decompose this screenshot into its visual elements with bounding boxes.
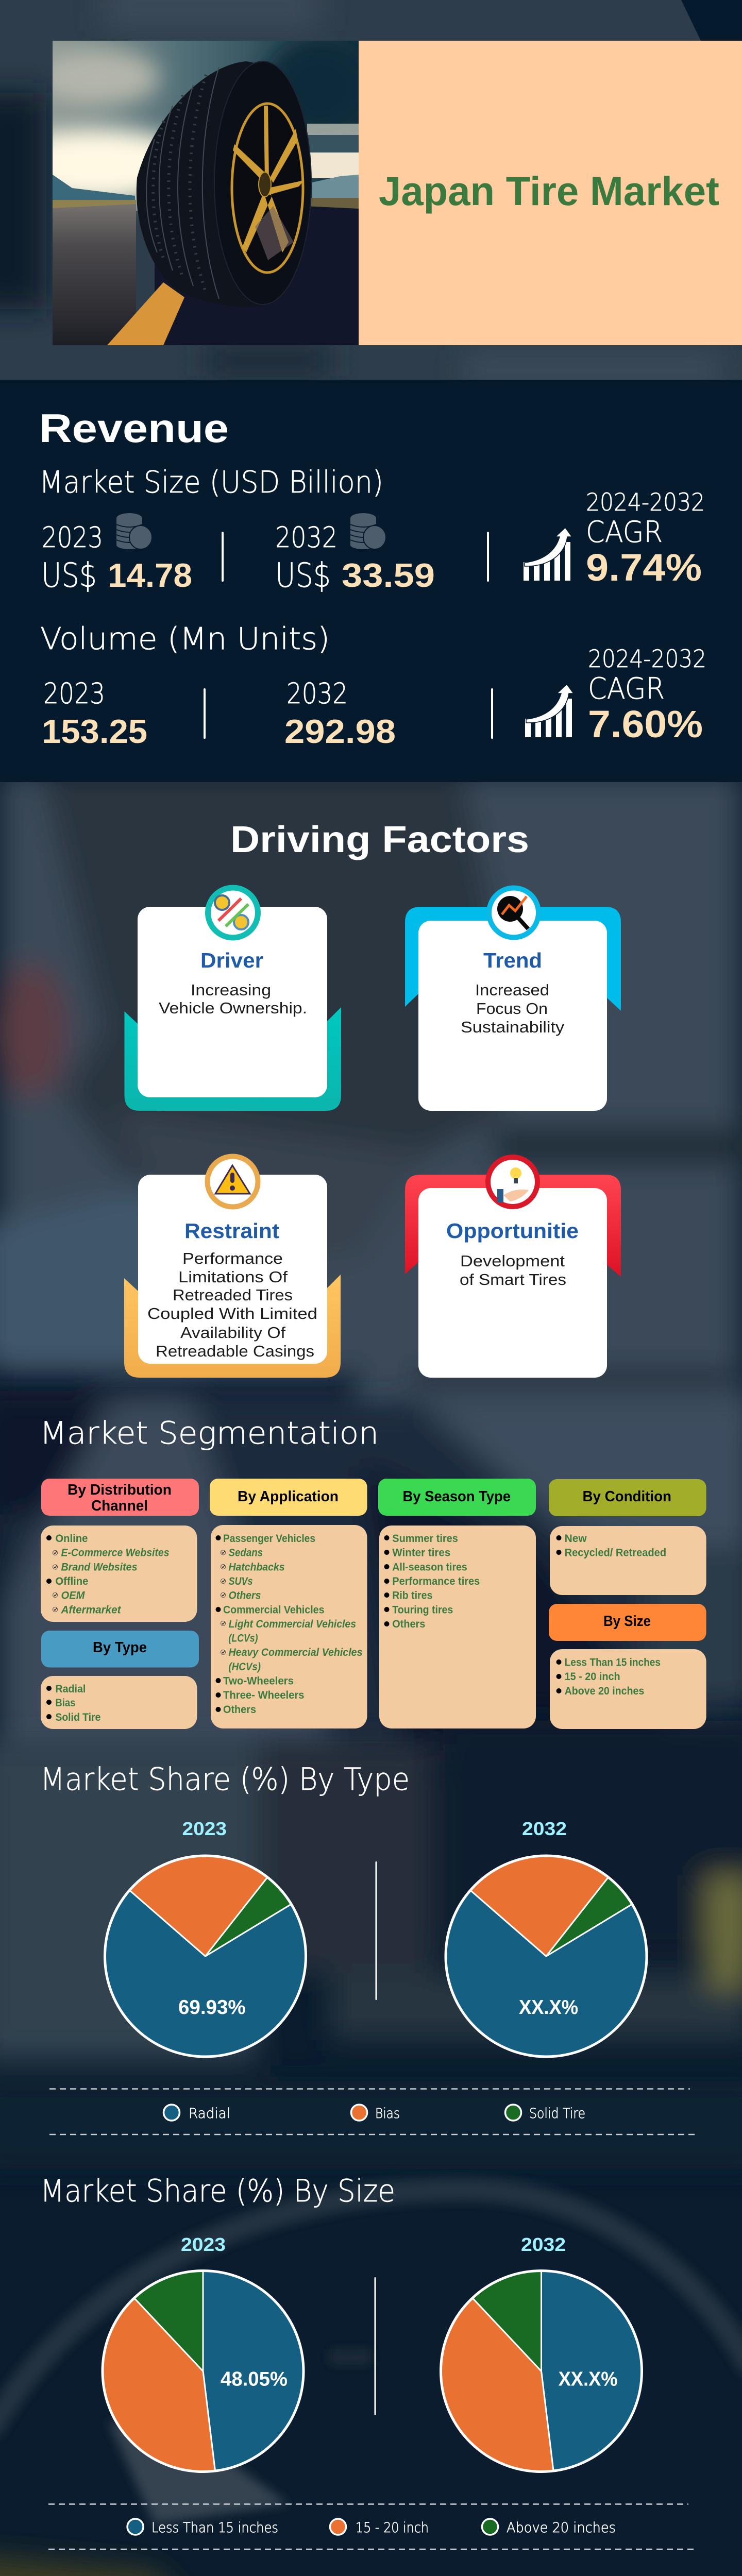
season list: Rib tires xyxy=(392,1590,432,1602)
stat: market size 2023: 2023 xyxy=(42,521,103,554)
distribution list: Brand Websites xyxy=(61,1561,137,1573)
pie chart: type 2023: 69.93% xyxy=(178,1996,246,2019)
application list: (HCVs) xyxy=(229,1661,261,1673)
icon: driver xyxy=(205,885,261,941)
panel: revenue xyxy=(0,380,742,782)
card: trend xyxy=(405,885,621,1111)
stat: market size CAGR: 9.74% xyxy=(586,546,702,589)
year label 2032: 2032 xyxy=(522,1818,567,1839)
stat: volume 2023: 2023 xyxy=(43,677,105,710)
stat: market size 2032: 33.59 xyxy=(342,556,435,594)
opportunity title: Opportunitie xyxy=(446,1219,579,1243)
stat: market size CAGR: 2024-2032 xyxy=(586,488,705,517)
application list: Others xyxy=(223,1704,256,1716)
distribution list: Aftermarket xyxy=(61,1604,121,1616)
driver text xyxy=(159,981,307,1017)
distribution list: Online xyxy=(55,1533,88,1545)
pie chart: size 2023 xyxy=(103,2271,303,2472)
season list: All-season tires xyxy=(392,1561,467,1573)
segment: by application xyxy=(210,1479,367,1728)
type list xyxy=(41,1676,197,1729)
legend: type: Bias xyxy=(375,2106,400,2122)
segment: by condition xyxy=(549,1479,706,1595)
icon: growth chart xyxy=(525,684,574,737)
stat: market size 2023 xyxy=(41,513,192,595)
icon: opportunity xyxy=(485,1155,540,1209)
condition list: Recycled/ Retreaded xyxy=(565,1547,666,1559)
restraint text xyxy=(147,1249,317,1360)
size list: 15 - 20 inch xyxy=(565,1671,620,1683)
stat: volume 2032: 292.98 xyxy=(284,713,396,750)
restraint text: Retreadable Casings xyxy=(156,1342,314,1360)
pie chart: size 2032 xyxy=(441,2271,642,2472)
application list: Hatchbacks xyxy=(229,1561,284,1573)
trend text: Focus On xyxy=(476,999,548,1018)
stat: volume 2032: 2032 xyxy=(286,677,348,710)
card: opportunity xyxy=(405,1155,621,1378)
application list: Light Commercial Vehicles xyxy=(229,1618,356,1630)
season list: Others xyxy=(392,1618,425,1630)
legend: size: 15 - 20 inch xyxy=(356,2520,429,2536)
segment: by application: By Application xyxy=(238,1488,339,1505)
condition list: New xyxy=(565,1533,587,1545)
restraint title: Restraint xyxy=(184,1219,279,1243)
stat: volume CAGR: CAGR xyxy=(588,672,665,706)
segment: by size xyxy=(549,1604,706,1729)
application list: Three- Wheelers xyxy=(223,1689,304,1701)
segment: by type: By Type xyxy=(93,1639,147,1656)
pie chart: type 2032: XX.X% xyxy=(519,1996,578,2019)
heading: share by size: Market Share (%) By Size xyxy=(40,2173,395,2209)
size list xyxy=(550,1649,706,1729)
trend text: Sustainability xyxy=(461,1018,565,1036)
year label 2032: 2032 xyxy=(521,2234,566,2255)
stat: volume CAGR: 7.60% xyxy=(588,703,703,745)
stat: volume 2023: 153.25 xyxy=(42,713,147,750)
icon: trend xyxy=(486,885,541,940)
stat: market size CAGR xyxy=(586,488,705,589)
distribution list xyxy=(41,1526,197,1622)
trend title: Trend xyxy=(483,948,542,972)
stat: market size 2023: US$ xyxy=(41,556,97,595)
application list: Commercial Vehicles xyxy=(223,1604,325,1616)
opportunity text: of Smart Tires xyxy=(460,1270,566,1289)
driver text: Increasing xyxy=(191,981,271,999)
stat: volume CAGR: 2024-2032 xyxy=(588,645,706,673)
legend: type: Radial xyxy=(189,2106,230,2122)
trend text xyxy=(461,981,565,1036)
type list: Bias xyxy=(55,1697,75,1709)
title: Japan Tire Market xyxy=(379,168,719,214)
year label 2023: 2023 xyxy=(182,1818,227,1839)
distribution list: OEM xyxy=(61,1590,85,1602)
size list: Above 20 inches xyxy=(565,1685,644,1697)
restraint text: Coupled With Limited xyxy=(147,1304,317,1323)
condition list xyxy=(550,1526,706,1595)
pie chart: type 2023 xyxy=(105,1856,306,2057)
year label 2023: 2023 xyxy=(181,2234,226,2255)
legend: size xyxy=(127,2519,616,2536)
season list: Touring tires xyxy=(392,1604,453,1616)
stat: volume CAGR xyxy=(588,645,706,745)
application list: SUVs xyxy=(229,1575,252,1587)
application list xyxy=(211,1525,367,1728)
tire xyxy=(137,61,311,307)
legend: size: Less Than 15 inches xyxy=(151,2520,278,2536)
heading: market segmentation: Market Segmentation xyxy=(40,1415,379,1451)
type list: Solid Tire xyxy=(55,1711,100,1723)
legend: type xyxy=(164,2105,585,2122)
card: restraint xyxy=(124,1154,341,1378)
application list: Others xyxy=(229,1590,261,1602)
legend: type: Solid Tire xyxy=(529,2106,585,2122)
pie chart: size 2023: 48.05% xyxy=(221,2368,288,2391)
pie chart: size 2032: XX.X% xyxy=(559,2368,618,2391)
application list: Heavy Commercial Vehicles xyxy=(229,1647,363,1658)
heading: volume: Volume (Mn Units) xyxy=(40,621,330,656)
season list: Performance tires xyxy=(392,1575,480,1587)
application list: (LCVs) xyxy=(229,1633,258,1645)
stat: market size CAGR: CAGR xyxy=(586,515,663,549)
size list: Less Than 15 inches xyxy=(565,1657,661,1668)
opportunity text xyxy=(460,1252,566,1289)
title panel xyxy=(359,41,742,345)
season list xyxy=(379,1526,536,1728)
application list: Two-Wheelers xyxy=(223,1675,294,1687)
heading: driving factors: Driving Factors xyxy=(230,819,529,860)
season list: Winter tires xyxy=(392,1547,450,1559)
segment: by distribution channel: Channel xyxy=(91,1498,148,1514)
restraint text: Availability Of xyxy=(180,1324,285,1342)
hero tire photo xyxy=(53,41,359,345)
stat: volume 2023 xyxy=(42,677,147,750)
segment: by size: By Size xyxy=(603,1613,651,1630)
heading: share by type: Market Share (%) By Type xyxy=(40,1761,410,1798)
restraint text: Retreaded Tires xyxy=(173,1286,293,1304)
opportunity text: Development xyxy=(460,1252,565,1270)
driver text: Vehicle Ownership. xyxy=(159,999,307,1017)
segment: by distribution channel: By Distribution xyxy=(68,1482,172,1498)
application list: Sedans xyxy=(229,1547,263,1559)
application list: Passenger Vehicles xyxy=(223,1533,315,1545)
card: driver xyxy=(125,885,341,1111)
heading: market size: Market Size (USD Billion) xyxy=(39,464,383,500)
segment: by condition: By Condition xyxy=(582,1488,671,1505)
segment: by type xyxy=(41,1631,199,1729)
distribution list: E-Commerce Websites xyxy=(61,1547,169,1559)
segment: by season type: By Season Type xyxy=(403,1488,511,1505)
stat: market size 2032: US$ xyxy=(275,556,331,595)
stat: market size 2032 xyxy=(275,513,435,595)
restraint text: Limitations Of xyxy=(178,1268,288,1286)
stat: volume 2032 xyxy=(284,677,396,750)
driver title: Driver xyxy=(200,948,263,972)
stat: market size 2032: 2032 xyxy=(275,521,338,554)
segment: by season type xyxy=(378,1479,536,1728)
trend text: Increased xyxy=(475,981,549,999)
legend: size: Above 20 inches xyxy=(507,2520,616,2536)
icon: restraint xyxy=(205,1154,261,1210)
type list: Radial xyxy=(55,1683,86,1695)
pie chart: type 2032 xyxy=(446,1856,647,2057)
distribution list: Offline xyxy=(55,1575,88,1587)
season list: Summer tires xyxy=(392,1533,458,1545)
stat: market size 2023: 14.78 xyxy=(108,556,192,594)
restraint text: Performance xyxy=(182,1249,283,1267)
segment: by distribution channel xyxy=(41,1479,199,1622)
heading: revenue: Revenue xyxy=(39,405,229,451)
icon: growth chart xyxy=(524,528,572,581)
